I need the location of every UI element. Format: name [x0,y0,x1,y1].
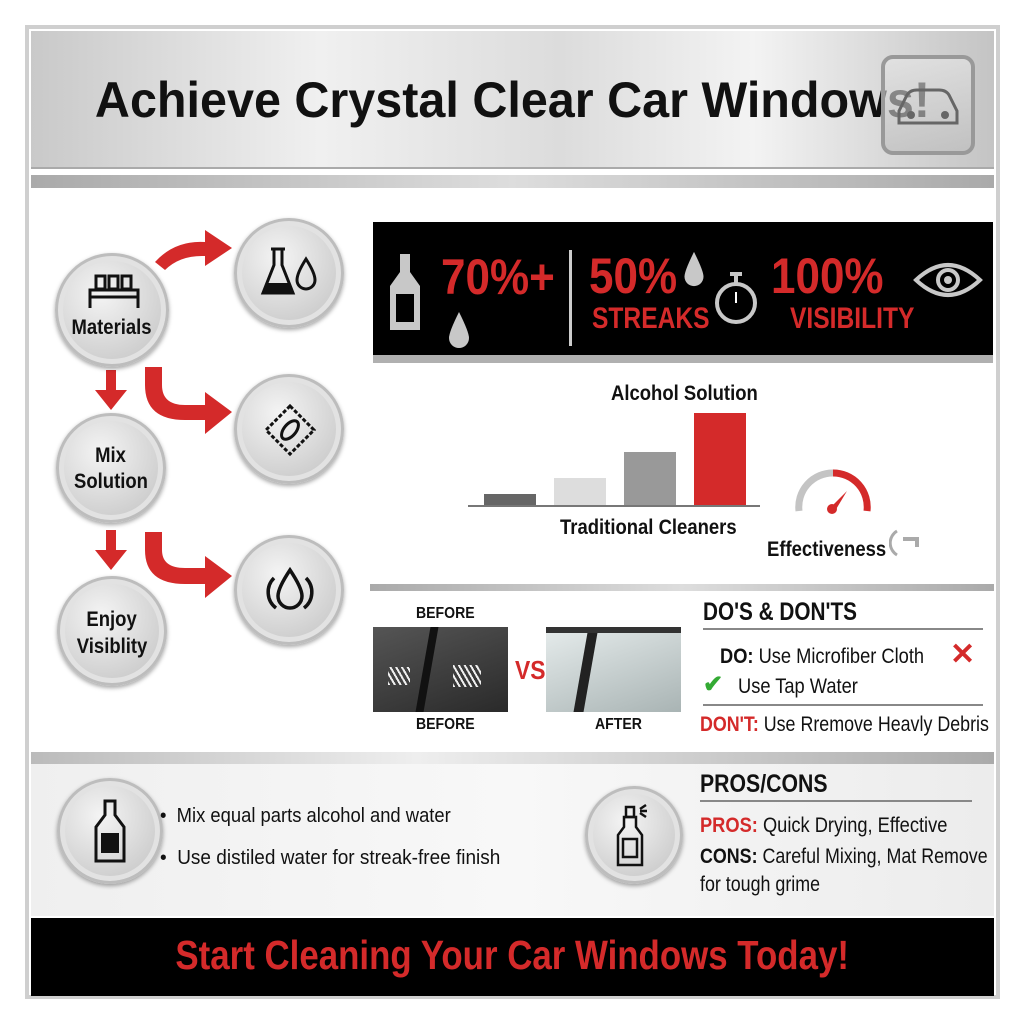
before/after comparison: AFTER [595,716,642,733]
node: Enjoy Visibility: Visiblity [77,635,147,658]
before/after comparison: BEFORE [416,605,475,622]
pros/cons: PROS: Quick Drying, Effective [700,814,947,837]
before/after comparison [373,605,681,733]
divider bar [31,175,994,188]
arrow: to drop [145,532,232,598]
icon: stopwatch [715,272,757,324]
icon: eye [913,262,983,298]
flow diagram [95,230,232,598]
stat: 50% streaks: 50% [589,248,677,304]
do's and don'ts: DO'S & DON'TS [703,598,857,626]
arrow: to cloth [145,367,232,434]
node: Enjoy Visibility: Enjoy [87,608,137,631]
arrow: to flask [155,230,232,270]
before/after comparison: BEFORE [416,716,475,733]
bottom section background [31,752,994,764]
gauge: effectiveness: Effectiveness [767,538,886,561]
node: Enjoy Visibility [57,576,167,686]
image: dirty window [373,627,508,712]
bar chart: Alcohol Solution [611,382,758,405]
icon: drops [449,312,469,348]
image: clean window [546,627,681,712]
node: Mix Solution [56,413,166,523]
do's and don'ts: Use Tap Water [738,675,858,698]
bar chart: Traditional Cleaners [560,516,737,539]
pros/cons [700,770,988,896]
pros/cons: CONS: Careful Mixing, Mat Remove [700,845,988,868]
do's and don'ts [700,598,989,736]
title: Achieve Crystal Clear Car Windows! [95,72,930,128]
icon circle: drop [234,535,344,645]
node: Materials: Materials [72,316,152,339]
do's and don'ts: DON'T: Use Rremove Heavly Debris [700,713,989,736]
gauge: effectiveness [767,470,919,561]
footer call to action [31,918,994,996]
icon: check: ✔ [703,671,723,698]
tips list [160,805,500,869]
stats panel [373,222,993,363]
icon circle: flask and drop [234,218,344,328]
node: Mix Solution: Solution [74,470,148,493]
icon circle: cloth [234,374,344,484]
tips list: • Mix equal parts alcohol and water [160,805,451,827]
stats panel: VISIBILITY [790,302,914,335]
stats panel: STREAKS [592,302,710,335]
icon: car badge [881,55,975,155]
stat: 70%+: 70%+ [441,249,555,305]
icon circle: bottle [57,778,163,884]
node: Materials [55,253,169,367]
footer call to action: Start Cleaning Your Car Windows Today! [176,932,849,978]
pros/cons: PROS/CONS [700,770,828,798]
icon: bottle [390,254,420,330]
pros/cons: for tough grime [700,873,820,896]
icon circle: spray bottle [585,786,683,884]
tips list: • Use distiled water for streak-free finish [160,847,500,869]
arrow: down 2 [95,530,127,570]
icon: red X: ✕ [950,638,975,671]
label: VS: VS [515,655,546,685]
node: Mix Solution: Mix [96,444,126,467]
header band [31,31,994,169]
arrow: down 1 [95,370,127,410]
stat: 100% visibility: 100% [771,248,884,304]
divider [370,584,994,591]
do's and don'ts: DO: Use Microfiber Cloth [720,645,924,668]
bar chart [468,382,760,539]
